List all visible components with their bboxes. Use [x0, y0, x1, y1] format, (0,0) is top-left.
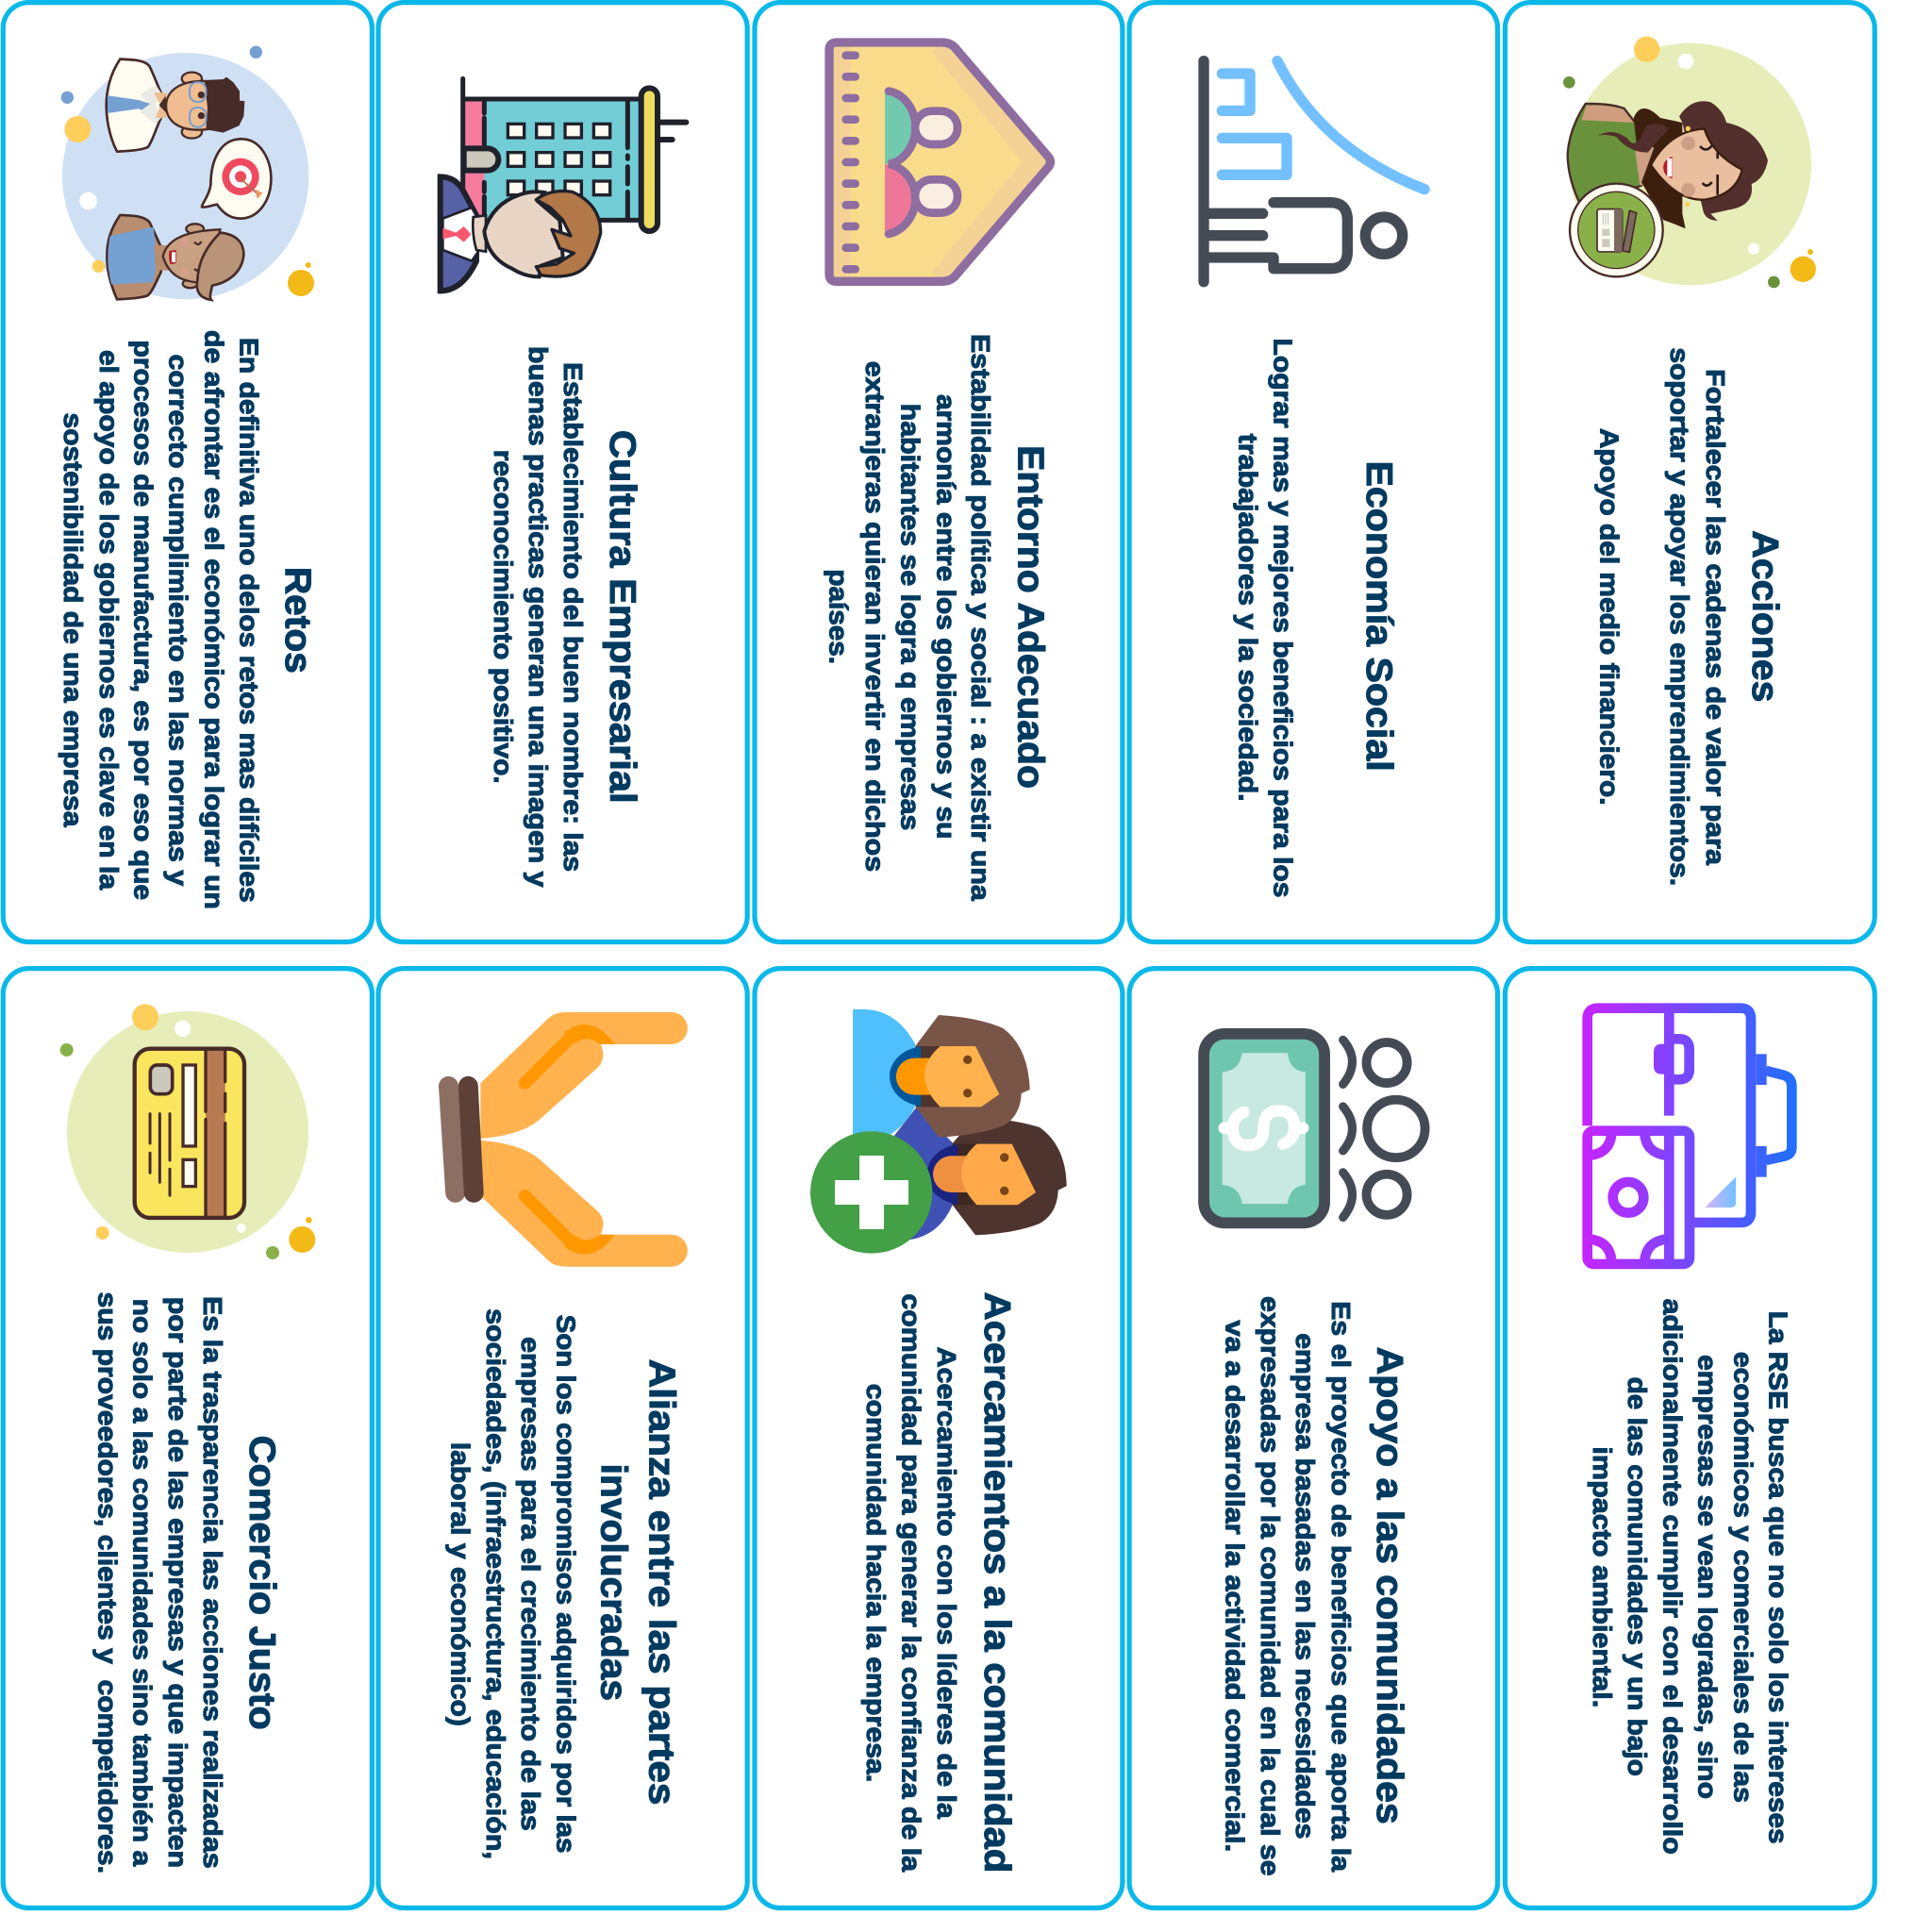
body text: armonía entre los gobiernos y su [931, 394, 960, 839]
body text: buenas practicas generan una imagen y [524, 346, 553, 888]
body text: por parte de las empresas y que impacten [163, 1297, 192, 1868]
panel: Entorno Adecuado [755, 3, 1123, 942]
card frame [1505, 969, 1874, 1908]
body text [1233, 339, 1298, 898]
heading [592, 1359, 681, 1805]
heading: Comercio Justo [242, 1436, 282, 1730]
panel: Acciones [1505, 3, 1874, 942]
body text: reconocimiento positivo. [489, 450, 518, 784]
card frame [755, 969, 1123, 1908]
heading: Cultura Empresarial [602, 430, 642, 804]
body text: no solo a las comunidades sino también a [128, 1299, 158, 1867]
body text [489, 346, 588, 888]
card frame [378, 3, 747, 942]
body text: Establecimiento del buen nombre: las [558, 362, 588, 872]
body text: soportar y apoyar los emprendimientos. [1665, 347, 1694, 886]
icon: office building with businessman [441, 78, 686, 291]
body text: Es el proyecto de beneficios que aporta la [1326, 1301, 1356, 1872]
body text: extranjeras quieran invertir en dichos [860, 361, 890, 872]
body text: Fortalecer las cadenas de valor para [1701, 369, 1730, 865]
icon: banknote with coins [1204, 1034, 1425, 1223]
heading: Economía Social [1358, 460, 1399, 772]
body text: Apoyo del medio financiero. [1595, 428, 1624, 806]
body text: La RSE busca que no solo los intereses [1764, 1311, 1793, 1844]
body text: adicionalmente cumplir con el desarrollo [1657, 1299, 1687, 1855]
body text: sus proveedores, clientes y competidores. [92, 1291, 122, 1874]
body text: empresa basadas en las necesidades [1291, 1333, 1320, 1839]
body text: Lograr mas y mejores beneficios para los [1269, 339, 1298, 898]
heading: Alianza entre las partes [641, 1359, 681, 1805]
panel: Apoyo a las comunidades [1129, 969, 1498, 1908]
heading: Acercamientos a la comunidad [976, 1291, 1017, 1873]
body text: Son los compromisos adquiridos por las [551, 1315, 580, 1853]
body text: Es la trasparencia las acciones realizadas [198, 1296, 227, 1869]
body text: Estabilidad política y social : a existir una [966, 334, 995, 901]
body text: Acercamiento con los líderes de la [932, 1347, 961, 1819]
body text [861, 1293, 961, 1872]
body text: trabajadores y la sociedad. [1233, 434, 1262, 802]
card frame [755, 3, 1123, 942]
body text: sociedades, (infraestructura, educación, [481, 1308, 510, 1859]
icon: credit card [60, 1004, 315, 1259]
body text: comunidad para generar la confianza de la [897, 1293, 926, 1872]
body text: países. [824, 569, 854, 664]
body text [58, 330, 264, 909]
icon: person and chart lines [1204, 61, 1424, 282]
icon: briefcase with banknote [1588, 1008, 1791, 1264]
icon: woman with credit card badge [1563, 37, 1816, 288]
card frame [1129, 3, 1498, 942]
heading: Acciones [1744, 530, 1785, 702]
icon: tag with two people [829, 42, 1050, 281]
panel: Cultura Empresarial [378, 3, 747, 942]
body text: impacto ambiental. [1588, 1446, 1617, 1707]
panel: Comercio Justo [3, 969, 372, 1908]
panel: Alianza entre las partes involucradas [378, 969, 747, 1908]
icon: two people with target speech bubble [61, 46, 314, 300]
body text: laboral y económico) [446, 1442, 475, 1726]
body text: habitantes se logra q empresas [895, 404, 924, 830]
body text: sostenibilidad de una empresa [58, 413, 88, 827]
icon: two hands [448, 1012, 688, 1267]
heading: Retos [277, 567, 318, 674]
body text: económicos y comerciales de las [1728, 1352, 1757, 1803]
heading: Entorno Adecuado [1010, 445, 1051, 789]
body text [92, 1291, 227, 1874]
card frame [1129, 969, 1498, 1908]
body text: En definitiva uno delos retos mas difíciles [235, 338, 264, 903]
body text: expresadas por la comunidad en la cual se [1256, 1296, 1285, 1876]
panel: RSE [1505, 969, 1874, 1908]
icon: two people with plus sign [810, 1009, 1067, 1254]
panel: Economía Social [1129, 3, 1498, 942]
card frame [1505, 3, 1874, 942]
heading: involucradas [592, 1464, 633, 1701]
body text: comunidad hacia la empresa. [861, 1384, 891, 1782]
body text: correcto cumplimiento en las normas y [164, 355, 193, 887]
card frame [378, 969, 747, 1908]
body text: procesos de manufactura, es por eso que [128, 340, 158, 900]
body text: empresas para el crecimiento de las [516, 1337, 545, 1831]
heading: Apoyo a las comunidades [1369, 1347, 1409, 1824]
body text: de afrontar es el económico para lograr un [199, 330, 228, 909]
body text: va a desarrollar la actividad comercial. [1221, 1321, 1250, 1852]
body text [1588, 1299, 1793, 1855]
body text: empresas se vean logradas, sino [1692, 1355, 1722, 1799]
panel: Acercamientos a la comunidad [755, 969, 1123, 1908]
body text [446, 1308, 580, 1859]
card frame [3, 969, 372, 1908]
panel: Retos [3, 3, 372, 942]
body text: de las comunidades y un bajo [1623, 1377, 1652, 1776]
card frame [3, 3, 372, 942]
body text [1595, 347, 1730, 886]
body text [1221, 1296, 1356, 1876]
body text [824, 334, 995, 901]
body text: el apoyo de los gobiernos es clave en la [94, 350, 124, 890]
